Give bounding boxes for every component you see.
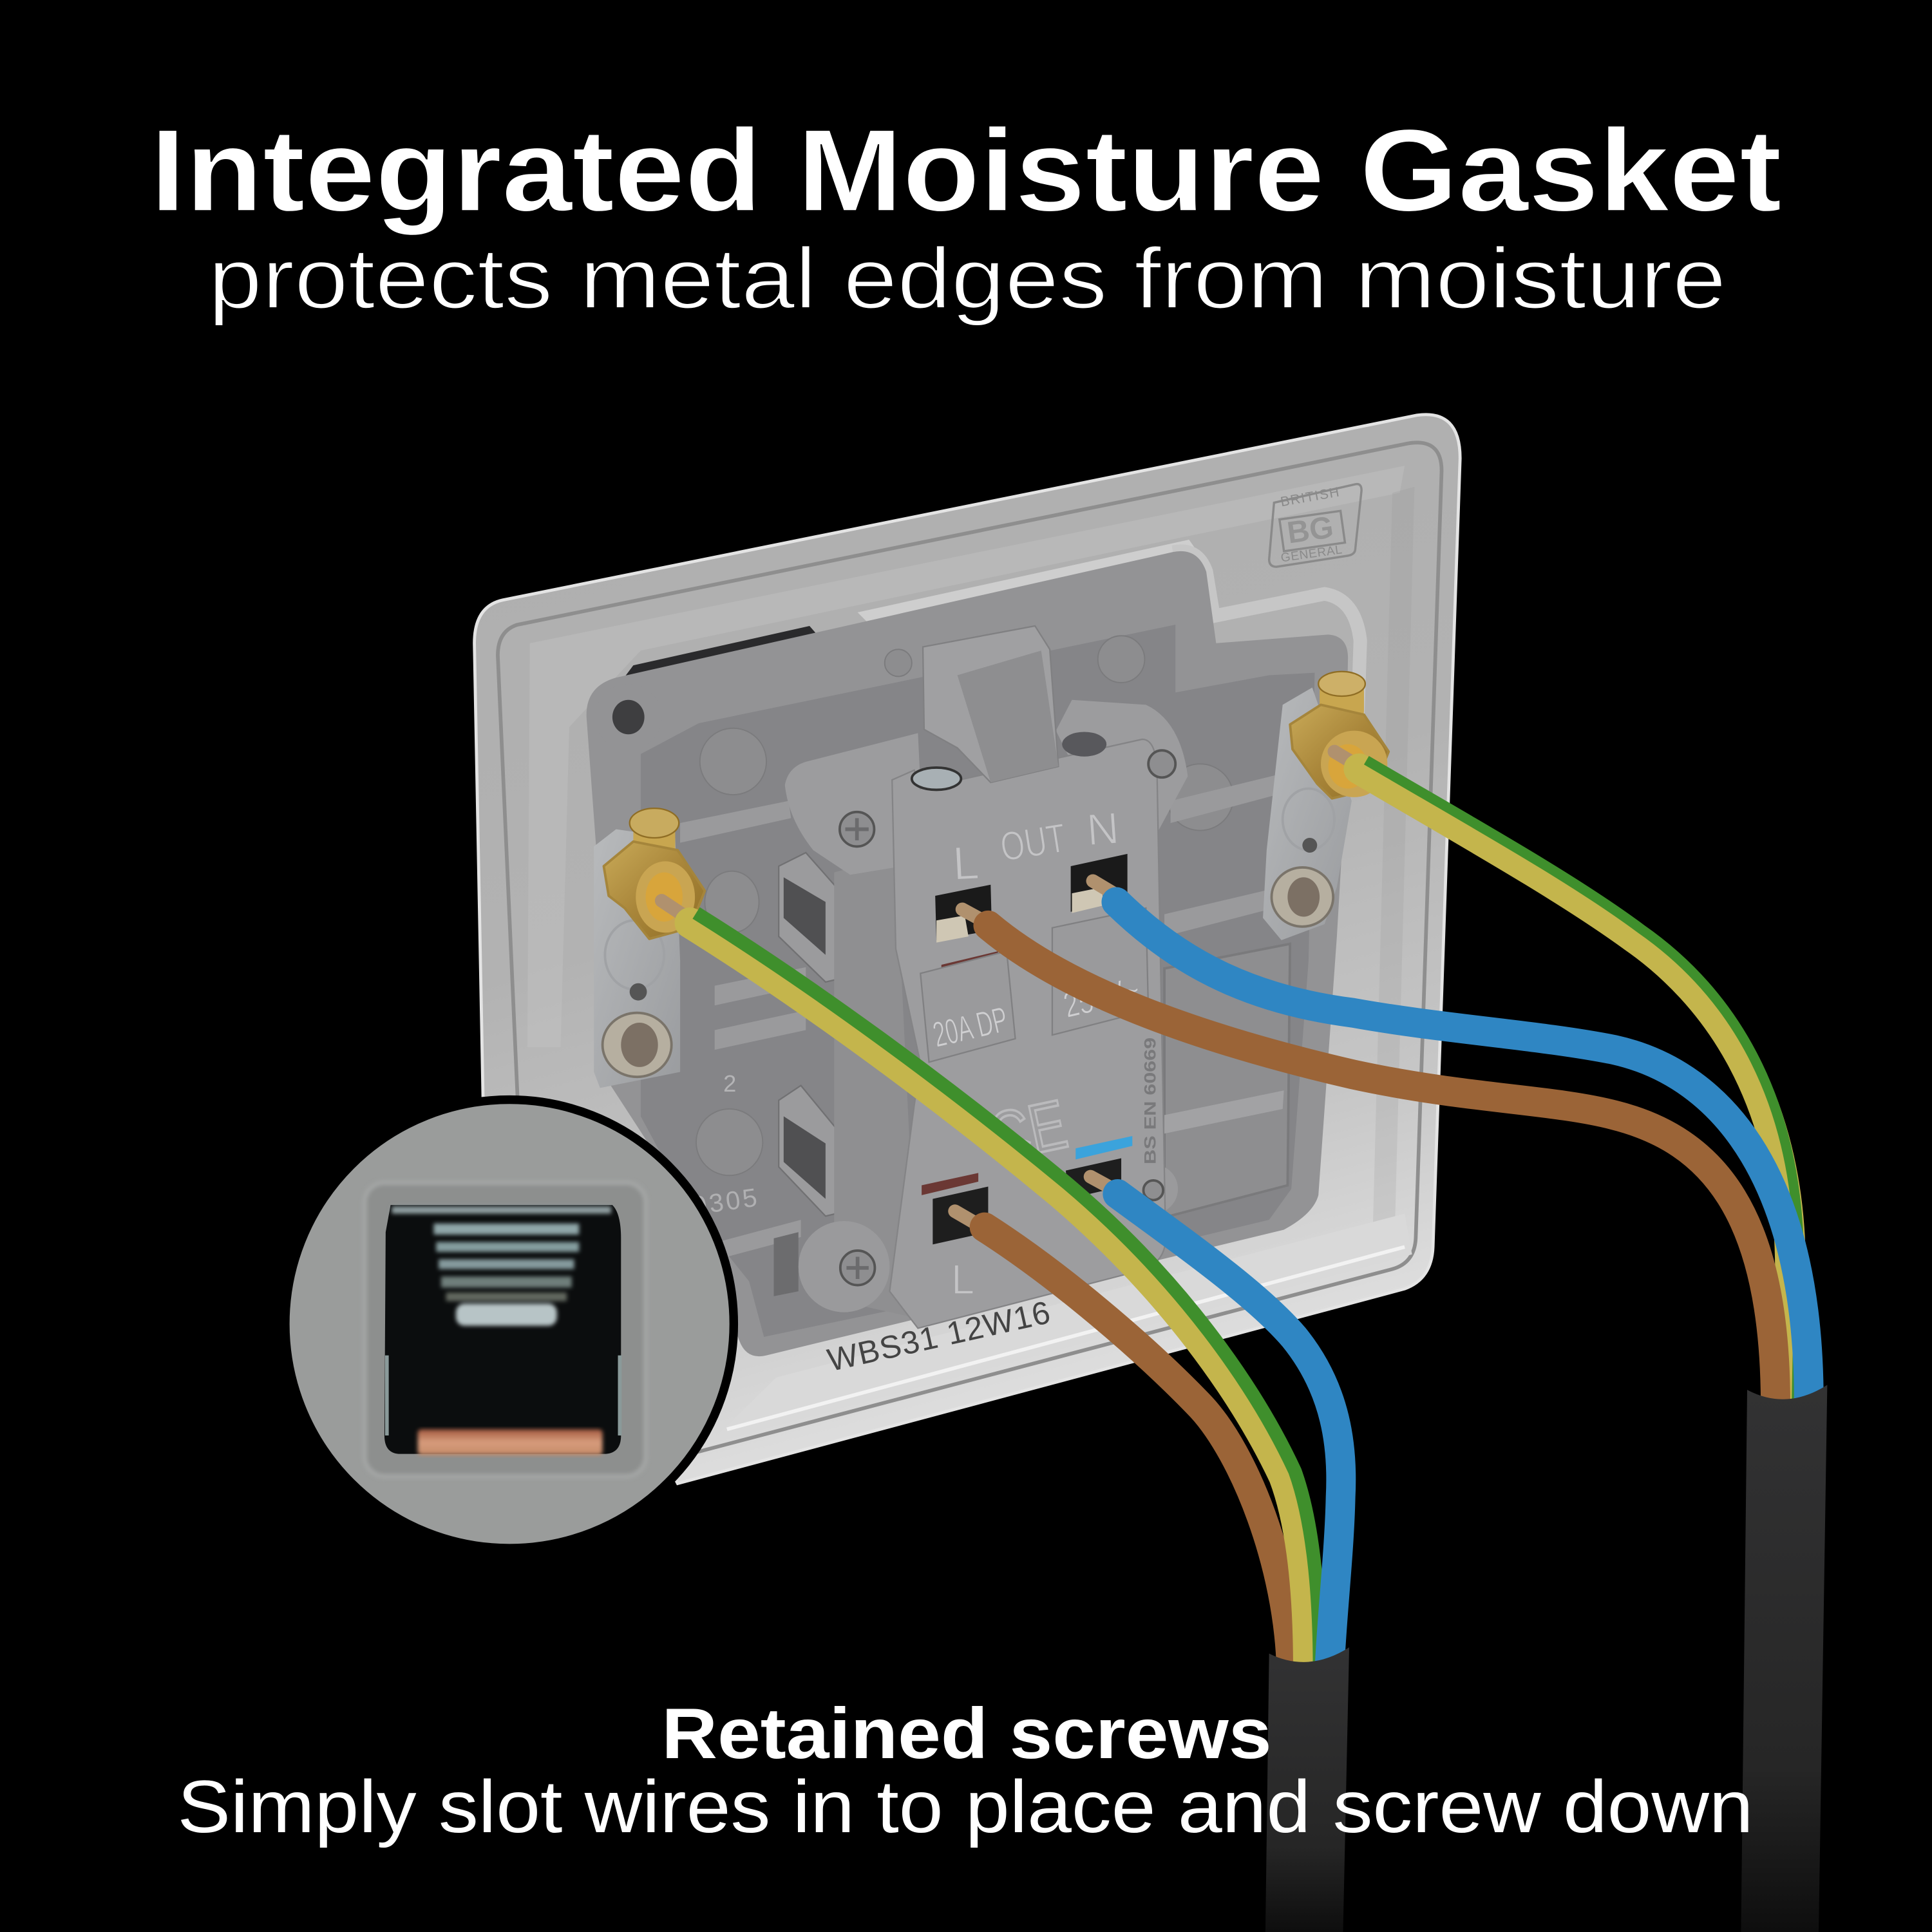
left earth wire <box>690 923 1309 1669</box>
rating panel left <box>920 951 1016 1062</box>
bright lower edge <box>708 1214 1412 1444</box>
brass screw <box>633 823 675 860</box>
subtitle: protects metal edges from moisture <box>208 231 1726 327</box>
inset close-up of terminal <box>285 1100 734 1548</box>
CE mark: CE <box>983 1085 1074 1177</box>
housing recess <box>641 625 1314 1337</box>
bottom left ear <box>799 1221 889 1312</box>
BG logo: BRITISH <box>1280 485 1340 509</box>
caption heading: Retained screws <box>661 1694 1271 1774</box>
strap hole small <box>1302 838 1317 853</box>
left earth stripe <box>696 913 1320 1669</box>
mounting eyelet <box>1271 867 1333 927</box>
screw cap <box>1318 672 1365 696</box>
block bore ring <box>636 861 695 933</box>
block bore ring <box>1321 731 1387 797</box>
right side band <box>1372 487 1414 1238</box>
mounting boss <box>595 684 661 750</box>
L bottom label: L <box>951 1256 974 1303</box>
terminal window N top <box>1071 854 1128 912</box>
bottom right ear <box>1129 1164 1178 1214</box>
left earth terminal <box>594 808 705 1088</box>
dark cavity <box>384 1205 621 1454</box>
exposed screw <box>912 768 961 790</box>
printed code: WBS31 12W16 <box>824 1294 1054 1378</box>
earth stamp <box>1283 788 1334 850</box>
inset detail <box>365 1183 646 1476</box>
housing ribs <box>680 774 1282 1262</box>
brown wire upper <box>988 925 1776 1411</box>
brown wire lower <box>985 1227 1291 1669</box>
terminal contact N top <box>1072 887 1103 913</box>
terminal window L top <box>935 885 992 940</box>
caption body: Simply slot wires in to place and screw down <box>178 1766 1754 1848</box>
notch <box>1062 732 1106 757</box>
lower dark window <box>774 1232 799 1296</box>
light strip above gasket <box>858 540 1198 623</box>
mounting hole <box>612 700 645 734</box>
metal plate <box>475 415 1460 1484</box>
neutral bar bottom <box>1075 1136 1132 1159</box>
cavity edge highlight <box>387 1356 620 1435</box>
strap <box>1263 688 1352 940</box>
brass block <box>604 842 705 939</box>
clip openings <box>784 877 826 1199</box>
plate inner rim <box>498 442 1442 1454</box>
OUT label: OUT <box>998 815 1069 870</box>
moulded code: 0305 <box>690 1182 761 1220</box>
block bore <box>1328 744 1368 788</box>
strap hole small <box>630 983 647 1001</box>
tab face <box>958 650 1058 782</box>
screw slots <box>845 818 869 1279</box>
module face <box>889 739 1166 1328</box>
module top ear right <box>1056 700 1188 838</box>
screw thread <box>392 1206 611 1326</box>
neutral bar top <box>1084 923 1128 942</box>
title: Integrated Moisture Gasket <box>150 104 1782 236</box>
BG logo <box>1269 484 1361 567</box>
eyelet hole <box>1287 877 1320 916</box>
BG logo: GENERAL <box>1280 543 1343 565</box>
moulded number: 2 <box>723 1070 736 1097</box>
terminal window N bottom <box>1066 1158 1121 1199</box>
terminal window L bottom <box>933 1186 988 1244</box>
left clips <box>779 853 846 1216</box>
copper contact <box>418 1429 603 1455</box>
wire cable left <box>1265 1647 1349 1932</box>
panel groove <box>1164 1090 1284 1133</box>
blue wire lower <box>1117 1194 1341 1669</box>
module side band <box>834 857 918 1318</box>
moulded discs <box>696 636 1233 1175</box>
rating text: 20A DP <box>929 999 1011 1055</box>
wires from lower terminals <box>661 901 1341 1669</box>
wire cable right <box>1741 1385 1827 1932</box>
top tab <box>923 626 1058 782</box>
right earth wire <box>1359 769 1790 1411</box>
block bore <box>646 873 683 922</box>
switch back plate <box>475 415 1460 1484</box>
voltage text: 250V~ <box>1060 969 1143 1025</box>
L top label: L <box>951 837 980 890</box>
gasket and rear housing <box>587 551 1360 1378</box>
eyelet hole <box>621 1023 658 1067</box>
terminal contact L top <box>936 916 969 943</box>
live bar bottom <box>922 1173 978 1195</box>
lower fold line <box>727 1247 1405 1429</box>
inset disc <box>285 1100 734 1548</box>
right earth terminal <box>1263 672 1388 940</box>
ear screws <box>840 750 1175 1285</box>
lower right panel <box>1164 944 1290 1217</box>
live bar top <box>942 951 998 973</box>
bare conductors upper <box>962 752 1359 924</box>
screw cap <box>630 808 679 838</box>
standard text: BS EN 60669 <box>1142 1037 1160 1164</box>
rating panel right <box>1052 908 1148 1035</box>
silver seal behind gasket <box>1173 551 1360 788</box>
translucent top band <box>527 466 1405 1047</box>
brass block <box>1290 705 1388 799</box>
bare conductors lower <box>661 901 1117 1229</box>
brass screw <box>1320 680 1364 722</box>
dark slot <box>622 626 818 680</box>
blue wire upper <box>1116 902 1809 1411</box>
wires from upper terminals <box>962 752 1809 1411</box>
earth stamp <box>605 920 664 989</box>
BG logo: BG <box>1285 510 1336 551</box>
strap <box>594 829 680 1088</box>
N label: N <box>1085 803 1121 855</box>
recess surround <box>365 1183 646 1476</box>
module top ear left <box>785 733 924 875</box>
right earth stripe <box>1367 760 1799 1411</box>
gasket outer <box>587 551 1348 1356</box>
mounting eyelet <box>603 1013 672 1077</box>
